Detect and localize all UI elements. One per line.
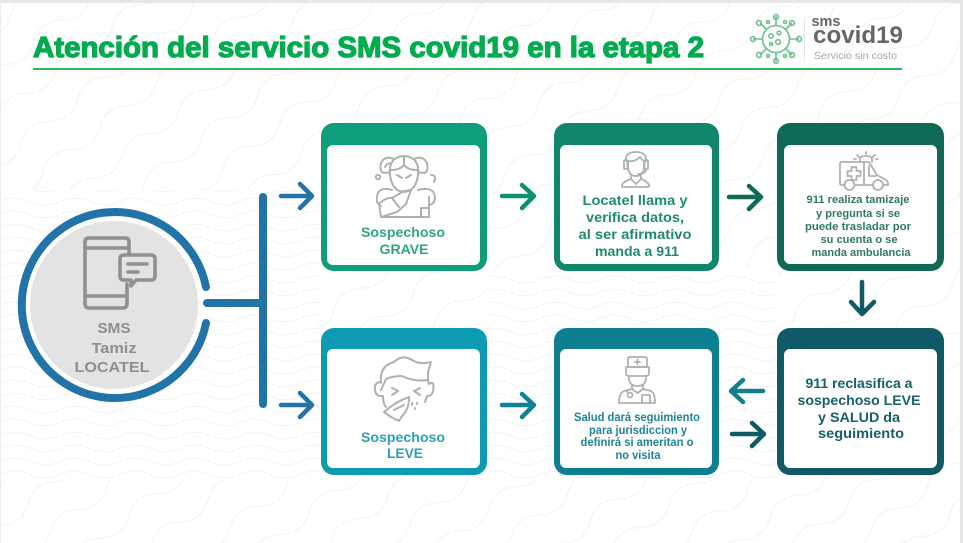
label: 911 text: su cuenta o se xyxy=(820,234,898,246)
logo: sms covid19 xyxy=(751,13,903,63)
label: Salud text: Salud dará seguimiento xyxy=(574,412,700,424)
logo: sms covid19: Servicio sin costo xyxy=(814,50,897,62)
panel: Sospechoso GRAVE xyxy=(321,123,487,271)
panel: 911 realiza tamizaje xyxy=(777,123,944,271)
panel: Salud seguimiento xyxy=(554,328,719,475)
label: Sospechoso GRAVE: GRAVE xyxy=(380,242,428,257)
label: Locatel text: verifica datos, xyxy=(586,209,684,225)
label: Locatel text: al ser afirmativo xyxy=(578,226,692,242)
icon: ambulance xyxy=(840,152,888,190)
panel: 911 reclasifica xyxy=(777,328,944,475)
label: 911 text: 911 realiza tamizaje xyxy=(806,194,910,206)
label: Salud text xyxy=(574,412,700,462)
label: 911 reclasifica text: y SALUD da xyxy=(818,410,901,425)
arrow: GRAVE to Locatel xyxy=(502,185,534,208)
logo: sms covid19: covid19 xyxy=(813,22,903,49)
label: 911 reclasifica text: 911 reclasifica a xyxy=(806,376,913,391)
arrow: Locatel to 911 xyxy=(729,186,761,209)
label: Sospechoso LEVE: Sospechoso xyxy=(361,430,445,445)
logo: sms covid19: sms xyxy=(812,13,840,30)
label: Sospechoso GRAVE: Sospechoso xyxy=(361,225,445,240)
label: Salud text: no visita xyxy=(616,450,661,462)
branching connector xyxy=(207,197,263,404)
arrow: LEVE to Salud xyxy=(502,394,534,417)
icon: virus xyxy=(751,15,801,63)
label: 911 reclasifica text xyxy=(798,376,920,441)
label: 911 text: manda ambulancia xyxy=(812,247,911,259)
label: Salud text: para jurisdiccion y xyxy=(589,425,688,437)
arrow: Salud to 911 xyxy=(732,423,764,446)
label: Sospechoso LEVE xyxy=(361,430,445,461)
icon: phone with message xyxy=(85,238,155,308)
label: Salud text: definirá si ameritan o xyxy=(580,437,694,449)
label: 911 reclasifica text: seguimiento xyxy=(818,426,904,441)
icon: call operator xyxy=(622,152,649,187)
icon: sneezing face xyxy=(375,357,434,421)
arrow: to Sospechoso LEVE xyxy=(281,393,312,417)
label: Sospechoso GRAVE xyxy=(361,225,445,257)
label: Locatel text xyxy=(578,192,692,259)
label: 911 text: puede trasladar por xyxy=(805,221,912,233)
label: Locatel text: Locatel llama y xyxy=(582,192,688,208)
circle label: SMS xyxy=(98,320,130,337)
label: 911 reclasifica text: sospechoso LEVE xyxy=(798,393,920,408)
title: Atención del servicio SMS covid19 en la etapa 2 xyxy=(33,32,704,64)
arrow: 911 back to Salud xyxy=(731,380,763,402)
circle label xyxy=(74,320,150,376)
icon: doctor xyxy=(619,357,655,403)
label: 911 text xyxy=(805,194,912,259)
label: Sospechoso LEVE: LEVE xyxy=(387,446,423,461)
circle label: LOCATEL xyxy=(74,359,150,376)
label: Locatel text: manda a 911 xyxy=(595,243,679,259)
panel: Locatel llama xyxy=(554,123,719,271)
arrow: 911 down xyxy=(851,282,874,314)
panel: Sospechoso LEVE xyxy=(321,328,487,475)
icon: coughing person xyxy=(376,156,435,217)
arrow: to Sospechoso GRAVE xyxy=(281,184,312,208)
label: 911 text: y pregunta si se xyxy=(816,208,900,220)
panel: SMS Tamiz LOCATEL circle xyxy=(22,212,206,398)
circle label: Tamiz xyxy=(92,340,136,357)
